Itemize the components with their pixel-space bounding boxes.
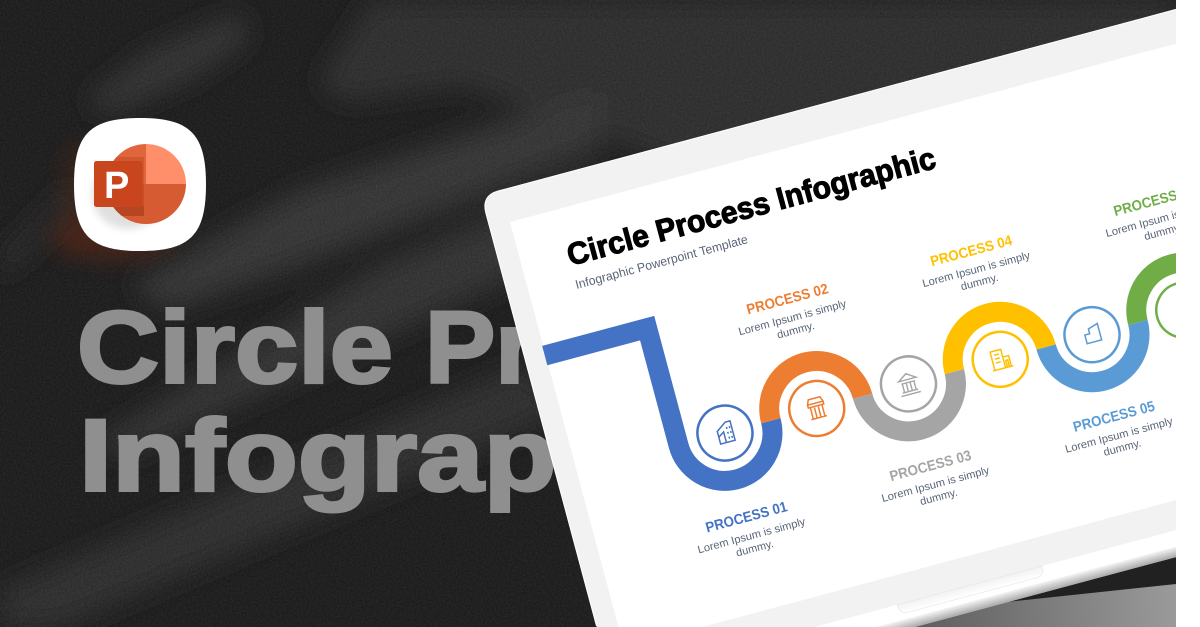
heading: Circle Process Infographic (large, behind laptop): Infographic bbox=[79, 398, 729, 512]
laptop notch bbox=[897, 566, 1045, 614]
desk surface below the laptop bbox=[916, 584, 1176, 627]
label: process 05: dummy. bbox=[1102, 437, 1142, 459]
label: process 04: Lorem Ipsum is simply bbox=[921, 250, 1032, 290]
label: process 02: PROCESS 02 bbox=[745, 281, 830, 318]
label: process 02: Lorem Ipsum is simply bbox=[737, 298, 848, 338]
ribbon segment 05 bbox=[1046, 322, 1150, 393]
slide subtitle: Infographic Powerpoint Template bbox=[574, 232, 749, 292]
step 03 circle and icon bbox=[880, 355, 938, 413]
label: process 04: dummy. bbox=[960, 272, 1000, 293]
label: process 01: Lorem Ipsum is simply bbox=[696, 516, 807, 556]
label: process 01: dummy. bbox=[735, 538, 775, 559]
ribbon segment 06 bbox=[1126, 253, 1176, 325]
heading: Circle Process Infographic (large, behind laptop): Process bbox=[425, 290, 835, 404]
label: process 03: PROCESS 03 bbox=[888, 448, 973, 485]
ribbon segment 04 bbox=[942, 301, 1046, 372]
process ribbon bbox=[542, 253, 1176, 491]
step 05 circle and icon bbox=[1063, 306, 1121, 364]
label: process 04: PROCESS 04 bbox=[929, 233, 1014, 270]
heading: Circle Process Infographic (large, behind laptop) bbox=[80, 307, 554, 514]
label: process 06: dummy. bbox=[1143, 222, 1183, 243]
label: process 03: Lorem Ipsum is simply bbox=[880, 465, 991, 505]
laptop lower lip bbox=[814, 530, 1176, 627]
step 06 circle bbox=[1154, 282, 1176, 338]
ribbon segment 01 bbox=[542, 316, 782, 491]
slide content bbox=[542, 150, 1176, 556]
icon: PowerPoint app badge bbox=[50, 118, 206, 260]
label: process 06 bbox=[1106, 190, 1176, 240]
step 04 circle and icon bbox=[971, 330, 1030, 388]
label: process 03: dummy. bbox=[919, 487, 959, 508]
step 01 circle and icon bbox=[696, 404, 754, 462]
slide screen bbox=[510, 44, 1176, 627]
heading: Circle Process Infographic (large, behind laptop): Circle bbox=[77, 290, 393, 404]
ribbon segment 02 bbox=[759, 350, 863, 421]
label: process 05: Lorem Ipsum is simply bbox=[1064, 415, 1175, 456]
ribbon segment 03 bbox=[863, 372, 967, 442]
laptop bezel bbox=[485, 9, 1176, 627]
step 02 circle and icon bbox=[788, 380, 846, 438]
label: process 05: PROCESS 05 bbox=[1071, 399, 1157, 436]
label: process 02: dummy. bbox=[776, 320, 816, 341]
slide title: Circle Process Infographic bbox=[563, 140, 939, 273]
label: process 01: PROCESS 01 bbox=[704, 499, 789, 536]
icon: PowerPoint app badge: P bbox=[104, 165, 129, 207]
